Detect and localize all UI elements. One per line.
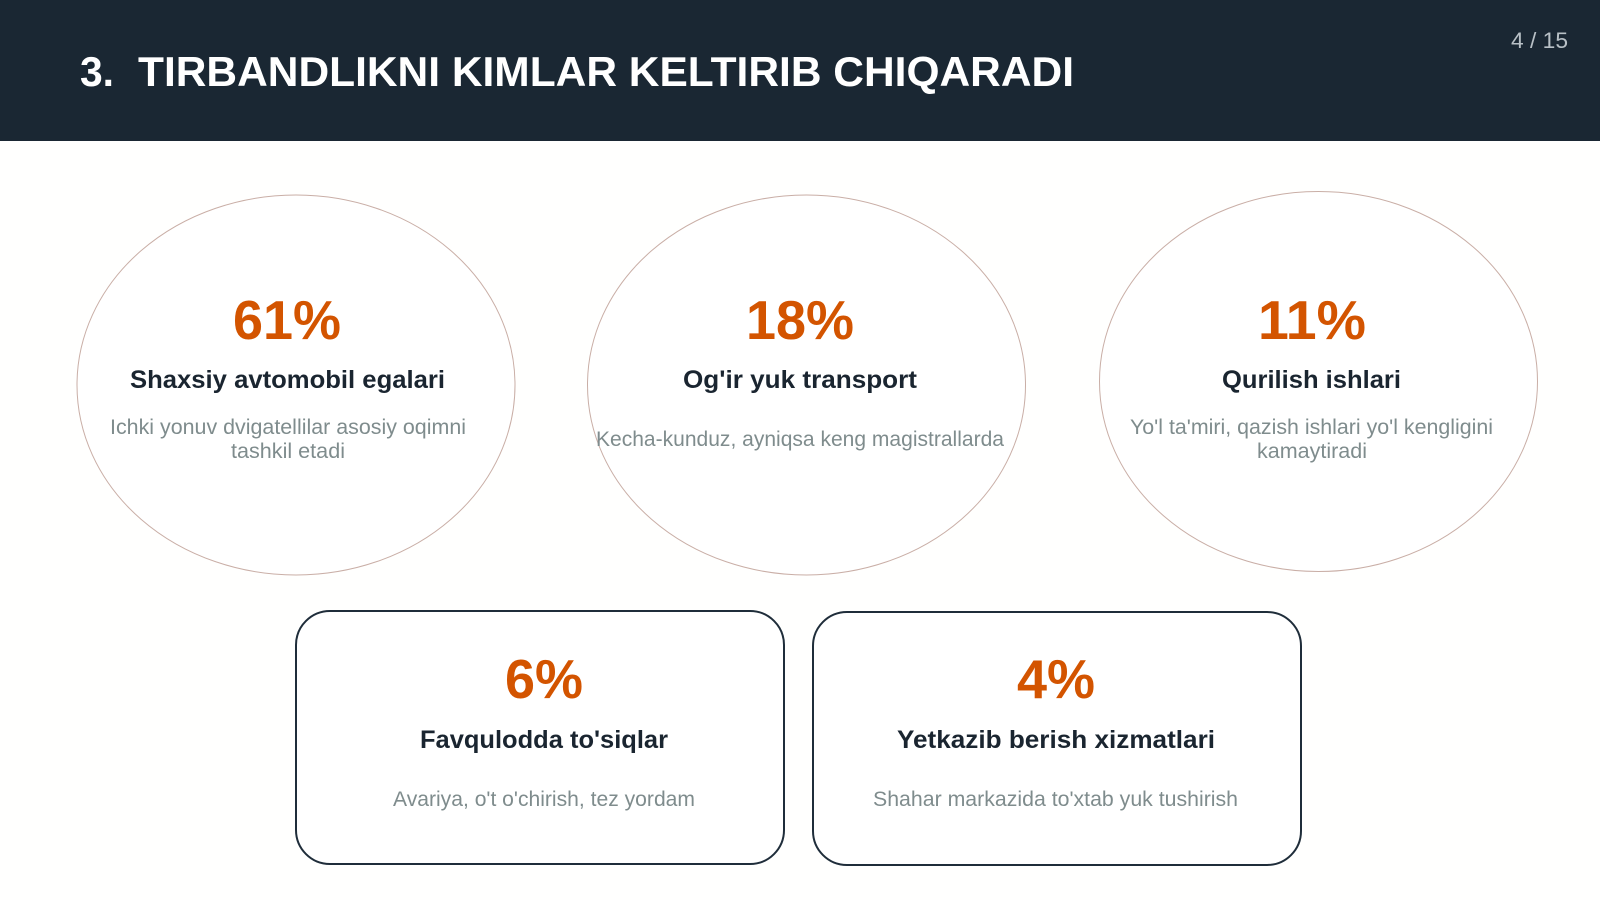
- description: Shahar markazida to'xtab yuk tushirish: [873, 788, 1238, 811]
- name: Yetkazib berish xizmatlari: [897, 726, 1215, 754]
- panel: construction works: [1100, 192, 1538, 572]
- description: [110, 416, 466, 463]
- percentage 11%: 11%: [1258, 289, 1366, 351]
- description: Avariya, o't o'chirish, tez yordam: [393, 788, 695, 811]
- title: 3.: [80, 48, 114, 95]
- panel: emergency stops: [296, 611, 784, 864]
- description: Kecha-kunduz, ayniqsa keng magistrallarda: [596, 428, 1004, 451]
- name: Shaxsiy avtomobil egalari: [130, 366, 445, 394]
- panel: heavy freight transport: [588, 195, 1026, 575]
- description: [1130, 416, 1493, 463]
- description: Yo'l ta'miri, qazish ishlari yo'l kengligini: [1130, 416, 1493, 439]
- header bar: [0, 0, 1600, 141]
- panel: delivery services: [813, 612, 1301, 865]
- percentage 4%: 4%: [1017, 648, 1095, 710]
- description: Ichki yonuv dvigatellilar asosiy oqimni: [110, 416, 466, 439]
- name: Og'ir yuk transport: [683, 366, 918, 394]
- name: Qurilish ishlari: [1222, 366, 1401, 394]
- percentage 6%: 6%: [505, 648, 583, 710]
- page number: 4 / 15: [1511, 28, 1568, 53]
- title: TIRBANDLIKNI KIMLAR KELTIRIB CHIQARADI: [138, 48, 1074, 95]
- name: Favqulodda to'siqlar: [420, 726, 668, 754]
- description: tashkil etadi: [231, 440, 345, 463]
- panel: personal car owners: [77, 195, 515, 575]
- percentage 61%: 61%: [233, 289, 341, 351]
- description: kamaytiradi: [1257, 440, 1367, 463]
- percentage 18%: 18%: [746, 289, 854, 351]
